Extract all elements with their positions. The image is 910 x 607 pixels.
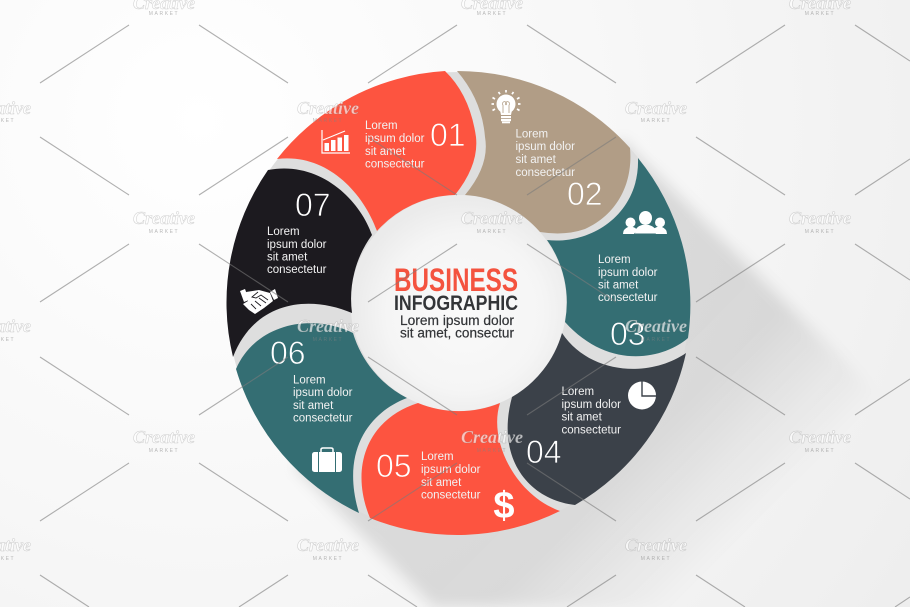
text: segment 01: Lorem — [365, 120, 398, 132]
watermarks: MARKET — [641, 556, 671, 562]
watermarks: Creative — [789, 427, 851, 447]
text: segment 04: Lorem — [562, 386, 594, 398]
text: segment 07: sit amet — [267, 252, 308, 264]
text: segment 02: sit amet — [516, 154, 557, 166]
panel: segment 04 — [508, 333, 686, 505]
grey base ring — [290, 134, 628, 472]
panel: segment 01 — [277, 71, 476, 231]
heading: infographic: INFOGRAPHIC — [394, 292, 518, 315]
watermarks: MARKET — [805, 229, 835, 235]
text: segment 07: ipsum dolor — [267, 239, 327, 251]
icon: briefcase — [312, 448, 342, 472]
text: segment 04: consectetur — [562, 424, 621, 436]
center title — [394, 262, 518, 340]
subtitle: sit amet, consectur — [400, 326, 515, 340]
watermarks: MARKET — [805, 448, 835, 454]
icon: pie chart — [628, 382, 656, 410]
text: segment 02: Lorem — [516, 128, 548, 140]
text: segment 05: sit amet — [421, 477, 462, 489]
watermarks: Creative — [461, 427, 523, 447]
number 02: 02 — [567, 176, 603, 212]
watermarks: MARKET — [149, 448, 179, 454]
watermarks: Creative — [297, 535, 359, 555]
watermarks: Creative — [625, 98, 687, 118]
icon: light bulb — [492, 90, 520, 123]
text: segment 01: sit amet — [365, 146, 406, 158]
watermarks: MARKET — [149, 11, 179, 17]
long shadow of the ring — [294, 139, 910, 607]
icon: people — [623, 211, 667, 234]
icon: handshake — [240, 289, 278, 314]
text: segment 05: Lorem — [421, 451, 454, 463]
icon: dollar sign: $ — [493, 485, 515, 527]
text: segment 03: ipsum dolor — [598, 267, 658, 279]
text: segment 03: Lorem — [598, 254, 631, 266]
number 05: 05 — [376, 448, 412, 484]
watermarks: MARKET — [313, 337, 343, 343]
text: segment 02: ipsum dolor — [516, 141, 575, 153]
text: segment 07: Lorem — [267, 226, 300, 238]
watermarks: MARKET — [805, 11, 835, 17]
text: segment 03: consectetur — [598, 292, 658, 304]
panel: segment 07 — [226, 168, 372, 357]
panel: segment 03 — [547, 158, 690, 356]
text: segment 01: consectetur — [365, 158, 425, 170]
panel: segment 06 — [236, 323, 407, 513]
subtitle: Lorem ipsum dolor — [400, 313, 515, 328]
text: segment 03: sit amet — [598, 280, 639, 292]
text: segment 04: ipsum dolor — [562, 399, 621, 411]
text: segment 07: consectetur — [267, 264, 327, 276]
watermarks: Creative — [625, 316, 687, 336]
watermarks: MARKET — [313, 556, 343, 562]
watermarks: MARKET — [641, 337, 671, 343]
text: segment 05: ipsum dolor — [421, 464, 481, 476]
panel: segment 05 — [361, 403, 560, 535]
watermarks: Creative — [297, 98, 359, 118]
number 06: 06 — [270, 335, 306, 371]
watermarks: MARKET — [313, 118, 343, 124]
watermarks: MARKET — [477, 448, 507, 454]
text: segment 05: consectetur — [421, 490, 481, 502]
text: segment 06: consectetur — [293, 412, 353, 424]
number 07: 07 — [295, 187, 331, 223]
watermarks: Creative — [461, 208, 523, 228]
heading: business: BUSINESS — [394, 262, 518, 298]
watermarks: Creative — [789, 208, 851, 228]
text: segment 06: ipsum dolor — [293, 387, 353, 399]
watermarks: MARKET — [477, 229, 507, 235]
text: segment 06: Lorem — [293, 374, 326, 386]
text: segment 02: consectetur — [516, 167, 575, 179]
text: segment 04: sit amet — [562, 412, 603, 424]
watermarks: Creative — [133, 427, 195, 447]
panel: segment 02 — [457, 71, 630, 233]
icon: growth chart — [322, 130, 350, 153]
center circle — [350, 195, 566, 411]
number 01: 01 — [430, 117, 466, 153]
number 03: 03 — [610, 316, 646, 352]
watermarks: Creative — [133, 208, 195, 228]
text: segment 06: sit amet — [293, 400, 334, 412]
watermarks: MARKET — [477, 11, 507, 17]
watermarks: Creative — [625, 535, 687, 555]
text: segment 01: ipsum dolor — [365, 133, 425, 145]
number 04: 04 — [526, 434, 562, 470]
watermarks: MARKET — [641, 118, 671, 124]
watermarks: MARKET — [149, 229, 179, 235]
watermarks: Creative — [297, 316, 359, 336]
